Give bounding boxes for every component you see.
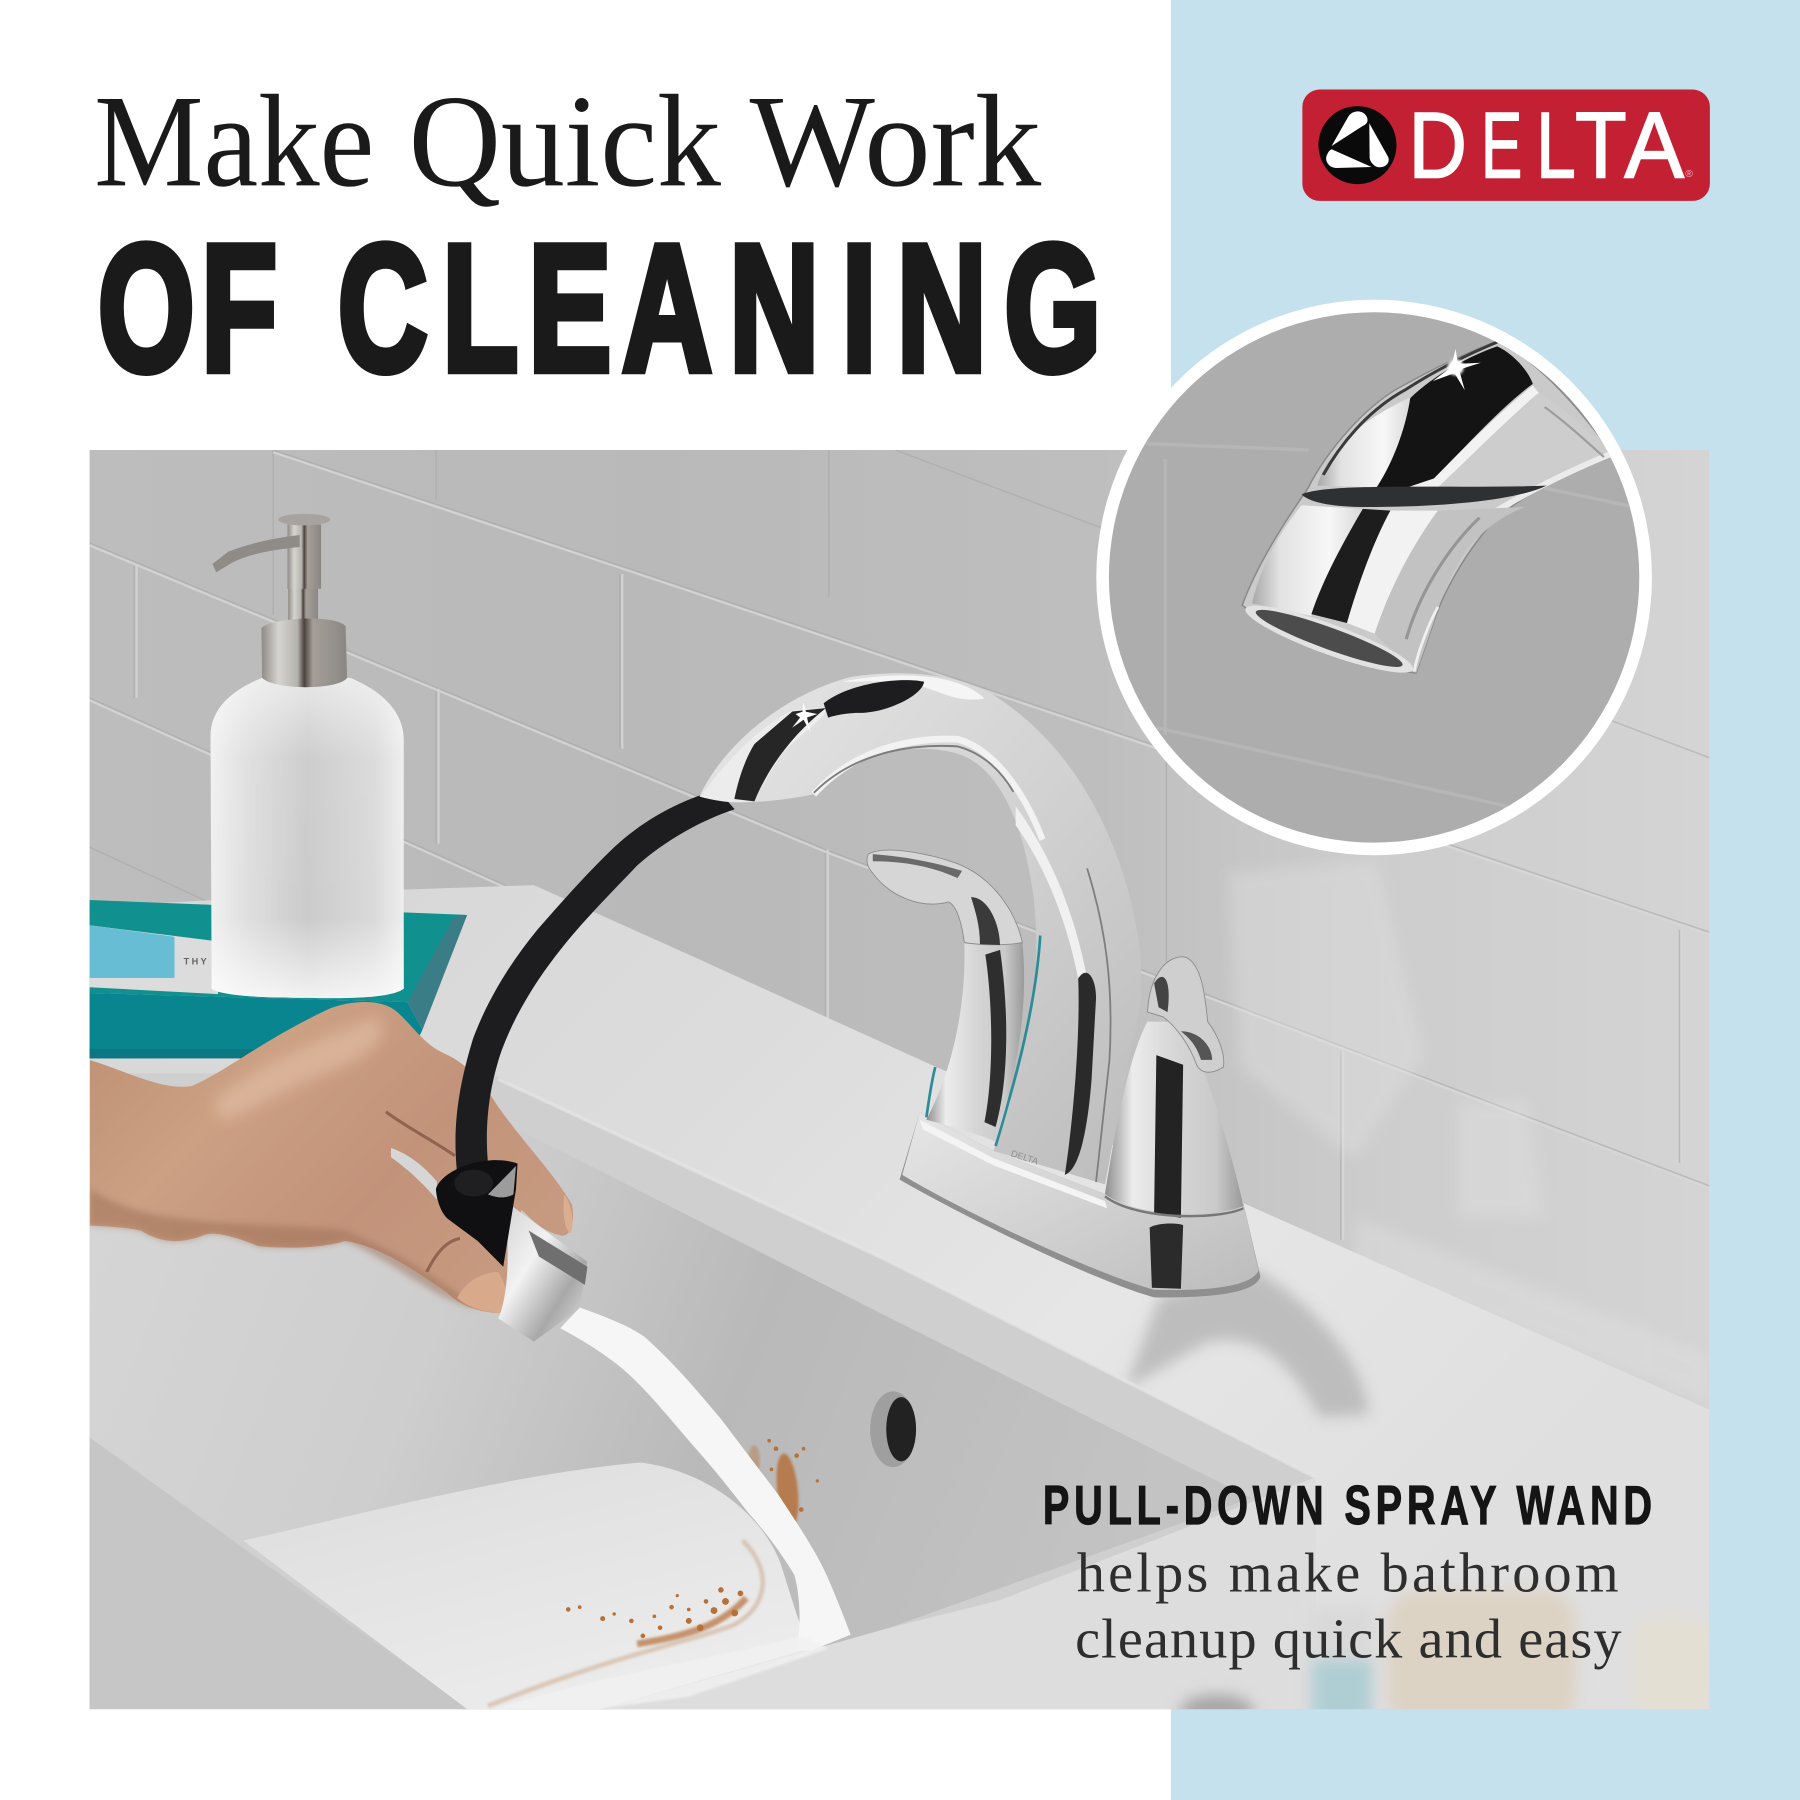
overflow hole [870, 1391, 916, 1467]
finger nail [563, 1194, 572, 1233]
icon: spout sparkle [792, 703, 817, 732]
soap dispenser [211, 514, 404, 998]
wand chrome body [498, 1200, 587, 1342]
basin rim [129, 1074, 1313, 1628]
caption heading: PULL-DOWN SPRAY WAND [1043, 1476, 1652, 1537]
basin floor [243, 1462, 809, 1709]
teal tray [90, 900, 467, 1058]
title: Make Quick Work: Make [94, 67, 374, 214]
right handle [1105, 957, 1243, 1218]
pump stem [288, 588, 318, 620]
vanity countertop [90, 885, 1709, 1709]
bottle body [211, 678, 404, 998]
blurred jars behind text [1176, 1586, 1706, 1710]
caption [1043, 1476, 1652, 1671]
thumb nail [457, 1272, 509, 1313]
hand holding wand [90, 1002, 573, 1313]
spout [700, 673, 1142, 1184]
chrome faucet [700, 673, 1260, 1297]
Delta logo badge: E [1481, 92, 1522, 197]
toothpaste tube: THY [184, 956, 209, 966]
faucet shadow on counter [1125, 1270, 1368, 1418]
Delta logo badge: D [1409, 93, 1467, 198]
black ring [1302, 486, 1547, 507]
braided black hose [455, 790, 735, 1188]
inset circle: spout detail [1096, 300, 1653, 855]
wand black collar [436, 1160, 518, 1267]
water stream [560, 1308, 850, 1709]
title: Make Quick Work [94, 67, 1041, 214]
toothpaste tube [90, 925, 218, 994]
Delta logo badge: A [1624, 93, 1685, 198]
base plate [900, 1113, 1260, 1297]
caption line two: cleanup quick and easy [1075, 1609, 1621, 1671]
upper chrome facets [1438, 393, 1612, 487]
counter front left [90, 1437, 467, 1709]
title: Make Quick Work: Quick [409, 67, 721, 214]
pump spout [212, 535, 300, 572]
pump cap [278, 514, 330, 525]
steel collar [261, 618, 347, 687]
Delta logo badge [1302, 90, 1710, 201]
Delta logo badge: T [1575, 92, 1627, 197]
title: OF CLEANING: OF CLEANING [98, 207, 1101, 409]
caption line one: helps make bathroom [1077, 1543, 1619, 1605]
icon: inset sparkle [1433, 349, 1481, 390]
counter front right [602, 1603, 988, 1709]
lower chrome facets [1252, 505, 1363, 616]
tiled wall [90, 450, 1709, 1709]
aerator mouth [1239, 595, 1419, 684]
rust stains [488, 1439, 819, 1706]
left handle [867, 850, 1024, 1141]
Delta logo badge: L [1536, 92, 1576, 198]
panel: bathroom photo [90, 450, 1710, 1728]
blue right-hand panel [1171, 0, 1800, 1800]
wall reflections [1233, 871, 1530, 1280]
Delta logo badge: ® [1685, 169, 1693, 180]
faucet brand mark: DELTA [1010, 1148, 1040, 1167]
inset chrome spout [1239, 341, 1612, 684]
basin wall [407, 1173, 1250, 1700]
pull-down spray wand head [436, 1160, 587, 1342]
title: Make Quick Work: Work [750, 67, 1041, 214]
sink basin [90, 1073, 1316, 1709]
